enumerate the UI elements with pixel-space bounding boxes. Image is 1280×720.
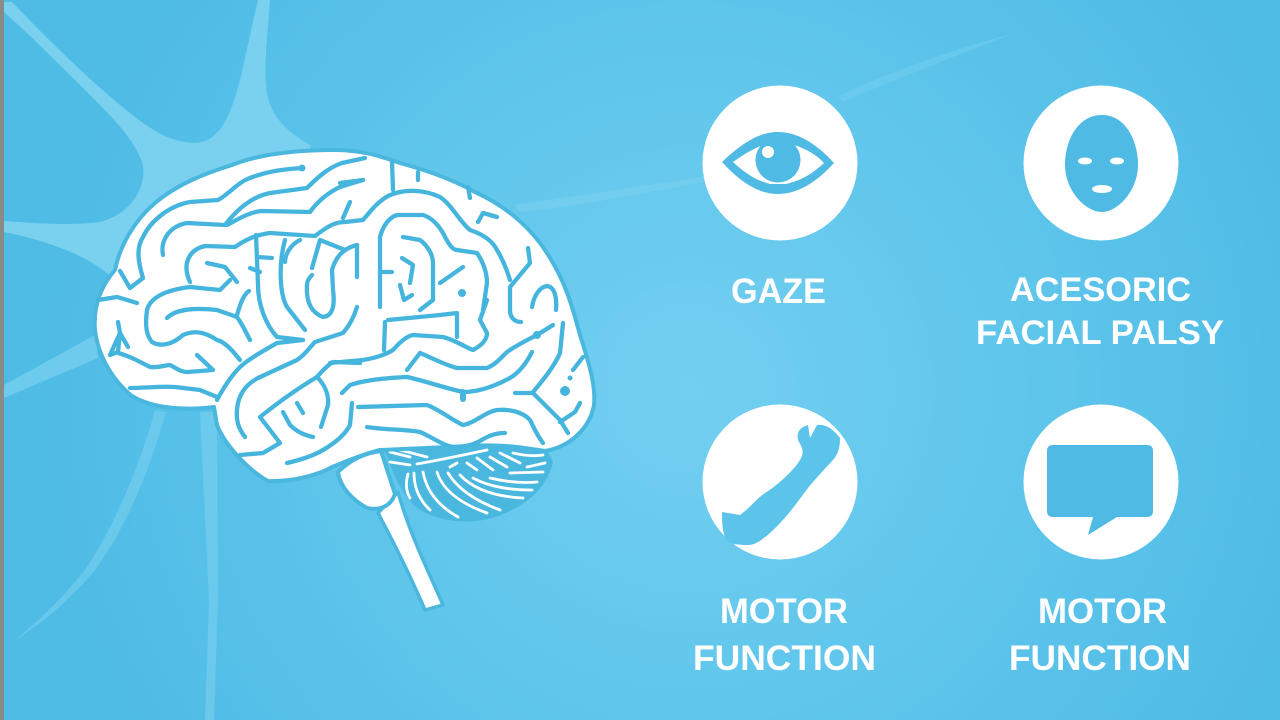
cerebrum silhouette <box>95 150 594 481</box>
label: accessory facial palsy: FACIAL PALSY <box>976 314 1224 352</box>
neuron background <box>4 0 1015 720</box>
label: motor function right <box>1009 592 1191 678</box>
brain folds <box>98 158 583 463</box>
pons <box>338 451 395 509</box>
brain illustration <box>95 150 594 610</box>
label: motor function left: FUNCTION <box>693 639 876 678</box>
label: motor function right: FUNCTION <box>1009 639 1191 678</box>
icon: eye <box>702 86 858 240</box>
label: gaze: GAZE <box>731 272 826 311</box>
icon: face <box>1024 86 1178 240</box>
cerebellum <box>383 446 553 521</box>
icon: arm <box>702 404 858 560</box>
label: motor function left <box>693 592 876 678</box>
label: motor function right: MOTOR <box>1038 592 1167 631</box>
label: accessory facial palsy <box>976 271 1224 352</box>
label: accessory facial palsy: ACESORIC <box>1010 271 1191 309</box>
brain stem <box>378 492 443 610</box>
label: motor function left: MOTOR <box>720 592 848 631</box>
icon: speech bubble <box>1024 404 1178 560</box>
